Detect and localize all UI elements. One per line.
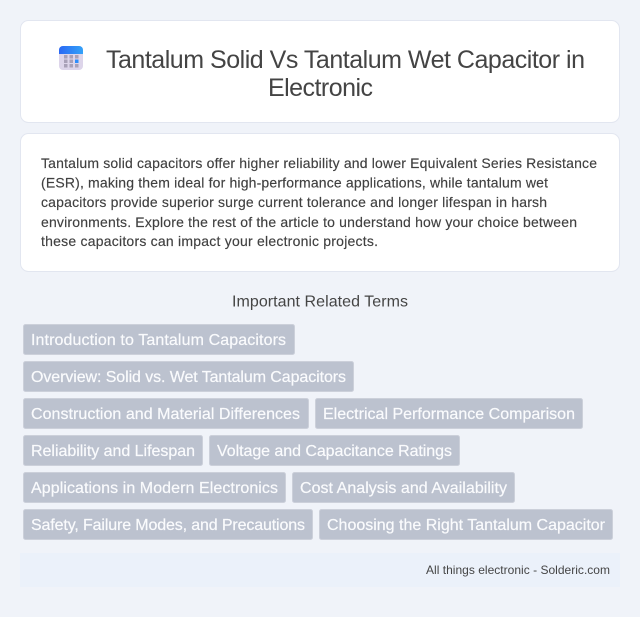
description text — [41, 155, 597, 249]
panel: description card — [20, 134, 620, 272]
tag: voltage — [210, 436, 460, 466]
tag: cost — [292, 472, 514, 502]
tag: construction: Construction and Material Differences — [31, 406, 300, 423]
tag: construction — [24, 398, 308, 428]
tag: electrical performance: Electrical Performance Comparison — [323, 406, 575, 423]
panel: title card — [20, 20, 620, 122]
tag: safety — [24, 510, 312, 540]
description text: environments. Explore the rest of the article to understand how your choice between — [41, 214, 577, 230]
tag: introduction: Introduction to Tantalum Capacitors — [31, 332, 286, 349]
tag: safety: Safety, Failure Modes, and Precautions — [31, 517, 305, 534]
tag: choosing — [320, 510, 612, 540]
description text: (ESR), making them ideal for high-performance applications, while tantalum wet — [41, 174, 548, 190]
heading: important related terms: Important Related Terms — [232, 294, 408, 310]
tag: applications — [24, 472, 286, 502]
tag: applications: Applications in Modern Electronics — [31, 480, 278, 497]
tag: voltage: Voltage and Capacitance Ratings — [217, 443, 452, 460]
description text: Tantalum solid capacitors offer higher reliability and lower Equivalent Series Resistance — [41, 155, 597, 171]
tag: cost: Cost Analysis and Availability — [300, 480, 507, 497]
title — [106, 46, 585, 102]
icon: calendar — [59, 46, 83, 70]
title: Electronic — [268, 74, 373, 102]
tag: reliability: Reliability and Lifespan — [31, 443, 195, 460]
footer: All things electronic - Solderic.com — [426, 563, 610, 577]
tag: introduction — [24, 324, 294, 354]
tag: overview — [24, 362, 354, 392]
footer — [20, 553, 620, 587]
tag: choosing: Choosing the Right Tantalum Capacitor — [327, 517, 606, 534]
tag: reliability — [24, 436, 202, 466]
description text: these capacitors can impact your electronic projects. — [41, 233, 378, 249]
tag list — [24, 324, 612, 540]
tag: electrical performance — [316, 398, 582, 428]
description text: capacitors provide superior surge current tolerance and longer lifespan in harsh — [41, 194, 547, 210]
tag: overview: Overview: Solid vs. Wet Tantalum Capacitors — [31, 369, 346, 386]
title: Tantalum Solid Vs Tantalum Wet Capacitor in — [106, 46, 585, 74]
